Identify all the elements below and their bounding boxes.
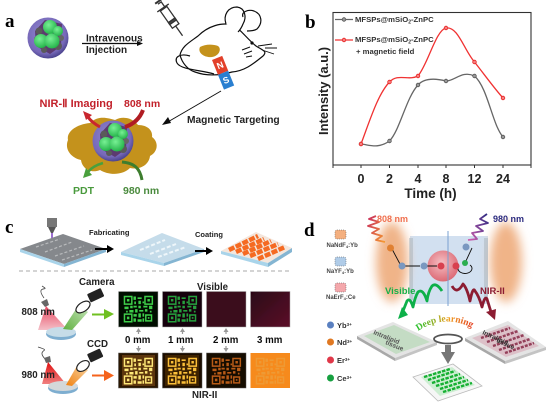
text: 980 nm: 980 nm <box>493 214 524 224</box>
x axis tick labels: 0 <box>358 172 365 186</box>
legend: crystal layers: 4 <box>346 244 349 249</box>
arrow: magnetic targeting <box>162 91 221 125</box>
tumor <box>199 45 220 57</box>
legend: ions: Yb <box>337 321 347 330</box>
legend: ions: 3+ <box>347 375 352 380</box>
x axis title: Time (h) <box>404 186 457 201</box>
icon: magnet <box>212 56 234 90</box>
x axis tick labels: 8 <box>443 172 450 186</box>
text: 980 nm label: 980 nm <box>22 370 55 381</box>
x axis tick labels <box>358 172 510 186</box>
icon: nanoparticle <box>28 18 68 58</box>
legend: MFSPs@mSiO <box>355 15 408 24</box>
setup: 980 nm <box>38 347 103 394</box>
legend: -ZnPC <box>411 35 434 44</box>
divider <box>19 270 290 272</box>
legend: crystal layers: :Ce <box>346 295 356 301</box>
legend: ions: 3+ <box>347 339 353 344</box>
legend: crystal layers: 4 <box>342 270 345 275</box>
heading: NIR-II: NIR-II <box>192 390 218 401</box>
text: 808 nm: 808 nm <box>124 98 160 110</box>
legend: crystal layers: 4 <box>344 296 347 301</box>
text: CCD: CCD <box>87 339 108 350</box>
text: 980 nm: 980 nm <box>123 185 159 197</box>
arrow: fabricating <box>95 245 114 253</box>
panel: b, line chart <box>305 12 531 201</box>
wave: NIR-II <box>452 284 496 320</box>
legend: ions: Ce <box>337 374 347 383</box>
legend: -ZnPC <box>411 15 434 24</box>
legend: + magnetic field <box>356 47 415 56</box>
arrows: NIR-II and 808 nm <box>83 110 143 127</box>
icon: processing ring and arrow <box>434 334 462 364</box>
images: visible row <box>118 292 290 327</box>
text: NIR-II: NIR-II <box>480 286 505 297</box>
plate: engraved <box>20 234 106 267</box>
depth labels and arrows: 3 mm <box>257 335 283 346</box>
legend: crystal layers: NaYF <box>326 269 342 275</box>
wave: visible <box>398 285 442 319</box>
arrows: PDT and 980 nm <box>83 162 142 180</box>
legend: 2 <box>408 40 411 46</box>
x axis tick labels: 2 <box>386 172 393 186</box>
plate: intralipid tissue <box>357 322 437 361</box>
text: camera: Camera <box>79 277 115 288</box>
icon: syringe <box>153 0 188 40</box>
tumor blob with particle <box>67 118 157 174</box>
panel: d, deep learning decoding <box>304 213 546 402</box>
chart frame <box>333 12 531 168</box>
legend <box>335 15 434 56</box>
legend: crystal layers: NaErF <box>326 295 344 301</box>
x axis tick labels: 12 <box>468 172 481 186</box>
wave: 980 nm <box>468 214 488 240</box>
depth labels and arrows <box>125 328 283 352</box>
legend: ions: Er <box>337 356 345 365</box>
legend: crystal layers: :Yb <box>344 269 354 275</box>
text: intravenous injection with arrow: Intravenous <box>86 34 143 44</box>
legend: ions: 3+ <box>347 322 352 327</box>
plate: intralipid tissue: Intralipid <box>372 329 400 346</box>
arrow: green <box>92 309 114 320</box>
legend: crystal layers <box>326 230 358 301</box>
nanocrystal diagram <box>376 222 522 306</box>
legend: ions: Nd <box>337 338 347 347</box>
x axis tick labels: 24 <box>496 172 510 186</box>
icon: magnet: S <box>221 74 231 86</box>
legend: crystal layers: :Yb <box>348 243 358 249</box>
x axis tick labels: 4 <box>415 172 422 186</box>
icon: laser head <box>47 218 57 241</box>
label: c: c <box>5 217 13 238</box>
icon: magnet: N <box>215 60 225 71</box>
panel: a, nanoparticle targeting <box>5 0 280 197</box>
plate: coated <box>221 232 292 267</box>
label: a: a <box>5 11 15 32</box>
legend: crystal layers: NaNdF <box>326 243 346 249</box>
plate: fabricated <box>121 233 204 266</box>
plate: intralipid tissue: tissue <box>384 339 405 353</box>
label: b: b <box>305 12 316 33</box>
text: fabricating: Fabricating <box>89 228 130 237</box>
setup: 808 nm <box>38 286 104 340</box>
text: intravenous injection with arrow: Injection <box>86 45 127 56</box>
legend: 2 <box>408 20 411 26</box>
y axis title: Intensity (a.u.) <box>316 47 331 135</box>
images: NIR-II row <box>118 353 290 388</box>
label: d: d <box>304 220 315 241</box>
text: NIR-II imaging: NIR-Ⅱ Imaging <box>40 98 113 110</box>
text: deep learning: Deep learning <box>415 315 474 331</box>
text: 808 nm: 808 nm <box>377 214 408 224</box>
wave: 808 nm <box>368 216 385 242</box>
arrow: coating <box>195 247 213 255</box>
depth labels and arrows: 0 mm <box>125 335 151 346</box>
plate: intralipid QR: Intralipid <box>481 329 509 347</box>
text: 808 nm label: 808 nm <box>22 307 55 318</box>
legend: ions: 3+ <box>345 357 350 362</box>
plate: intralipid QR: tissue <box>495 337 516 352</box>
depth labels and arrows: 2 mm <box>213 335 239 346</box>
series: red <box>359 26 505 146</box>
text: visible: Visible <box>385 286 415 297</box>
legend: MFSPs@mSiO <box>355 35 408 44</box>
heading: visible: Visible <box>197 282 229 293</box>
text: intravenous injection with arrow <box>82 34 143 56</box>
plate: intralipid QR <box>465 321 546 364</box>
plate: decoded QR <box>413 364 482 401</box>
legend: ions <box>327 321 353 383</box>
depth labels and arrows: 1 mm <box>168 335 194 346</box>
text: magnetic targeting: Magnetic Targeting <box>187 115 280 126</box>
text: PDT: PDT <box>73 185 95 197</box>
series: gray <box>359 74 505 146</box>
icon: mouse outline <box>176 7 277 75</box>
arrow: orange <box>92 370 114 381</box>
text: coating: Coating <box>195 230 223 239</box>
panel: c, QR fabrication and imaging <box>5 217 292 401</box>
